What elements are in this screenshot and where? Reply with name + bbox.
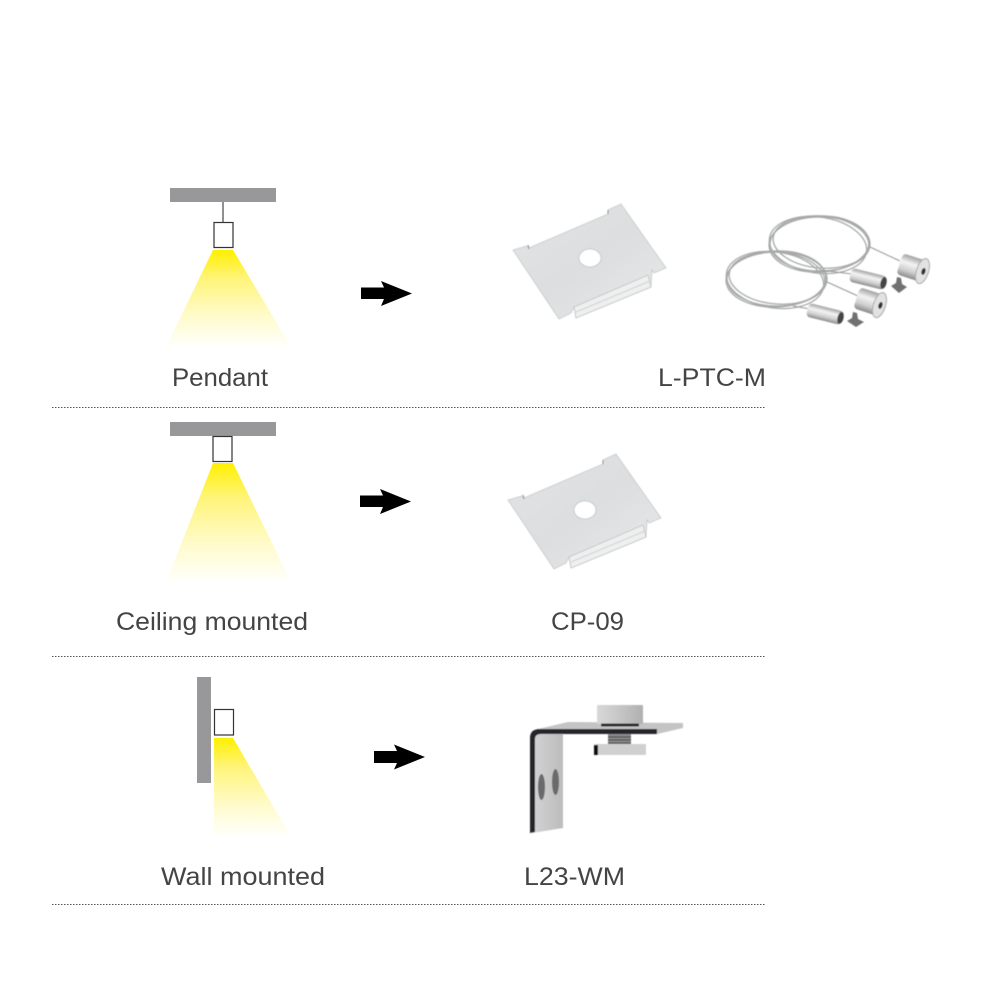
diagram: wall mounting bbox=[197, 677, 290, 835]
arrow: wall to L23-WM bbox=[374, 744, 425, 770]
label: Ceiling mounted: Ceiling mounted bbox=[116, 608, 308, 636]
diagram: ceiling mounting bbox=[167, 422, 290, 580]
label: Wall mounted: Wall mounted bbox=[161, 863, 325, 891]
product: L23-WM bracket bbox=[530, 705, 683, 833]
label: CP-09: CP-09 bbox=[551, 608, 624, 636]
product: L-PTC-M suspension cables bbox=[723, 210, 932, 327]
product: L-PTC-M plate bbox=[513, 204, 666, 319]
arrow: ceiling to CP-09 bbox=[360, 489, 411, 514]
label: Pendant: Pendant bbox=[172, 364, 268, 392]
product: CP-09 plate bbox=[508, 454, 661, 569]
label: L23-WM: L23-WM bbox=[524, 863, 625, 891]
arrow: pendant to L-PTC-M bbox=[361, 281, 412, 306]
diagram: pendant mounting bbox=[167, 188, 290, 345]
label: L-PTC-M: L-PTC-M bbox=[658, 364, 766, 392]
